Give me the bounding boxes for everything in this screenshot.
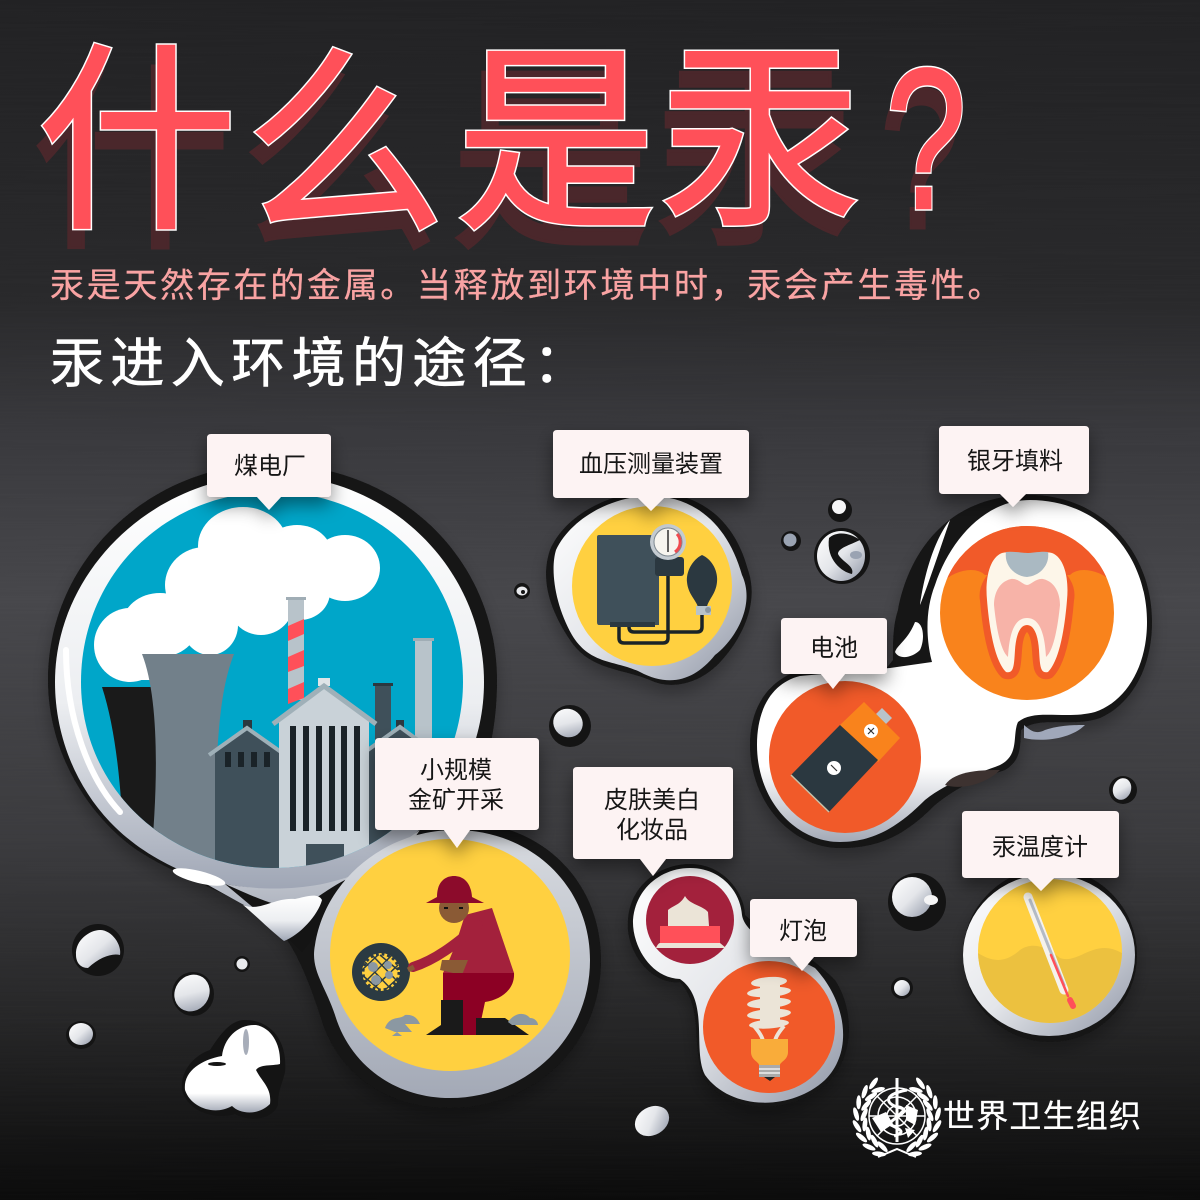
striped stack <box>286 597 306 704</box>
droplet <box>548 703 591 747</box>
WHO logo <box>851 1076 943 1157</box>
title white outline: 什 <box>37 32 237 255</box>
label: 灯泡 <box>750 899 857 971</box>
title text: 么 <box>245 35 445 258</box>
tooth <box>987 552 1067 672</box>
gauge <box>650 524 686 560</box>
cuff <box>597 535 659 625</box>
label: 小规模金矿开采: 小规模 <box>420 757 492 784</box>
silver blob <box>554 496 747 680</box>
title white outline <box>37 27 966 258</box>
eyes <box>444 907 463 909</box>
staff and serpent <box>889 1078 907 1142</box>
title shadow: 么 <box>239 55 439 278</box>
title text <box>37 27 966 258</box>
title text: 是 <box>456 32 656 255</box>
label: 电池: 电池 <box>810 635 858 662</box>
left building <box>209 720 281 870</box>
droplet <box>234 956 250 972</box>
continents <box>872 1105 918 1138</box>
hat <box>426 876 484 903</box>
label: 血压测量装置: 血压测量装置 <box>579 451 723 478</box>
title shadow: 是 <box>450 52 650 275</box>
dark puddle <box>945 770 1000 787</box>
face <box>439 893 469 923</box>
droplet <box>828 498 852 522</box>
title white outline: ? <box>886 27 966 250</box>
blob: black outer <box>48 464 601 1108</box>
subtitle: 汞是天然存在的金属。当释放到环境中时，汞会产生毒性。 <box>50 267 1004 305</box>
droplet <box>66 1021 96 1049</box>
label: 汞温度计: 汞温度计 <box>992 834 1088 861</box>
rocks <box>385 1014 538 1036</box>
black blob <box>750 495 1152 848</box>
droplet <box>781 531 801 551</box>
smoke cloud <box>94 507 380 682</box>
illustration: gold miner <box>352 876 538 1036</box>
silver blob <box>757 500 1147 842</box>
label: 小规模金矿开采: 金矿开采 <box>408 787 504 814</box>
title white outline: 是 <box>456 32 656 255</box>
laurel wreath <box>851 1076 943 1157</box>
droplet <box>514 583 530 599</box>
label: 皮肤美白化妆品: 化妆品 <box>616 817 688 844</box>
silver blob <box>633 868 843 1103</box>
illustration: power plant <box>94 507 434 872</box>
cosmetics circle <box>646 876 734 964</box>
droplet <box>891 977 913 999</box>
title white outline: 汞 <box>660 28 860 251</box>
label: 煤电厂: 煤电厂 <box>234 453 306 480</box>
title white outline: 么 <box>245 35 445 258</box>
label: 电池 <box>781 618 887 689</box>
panel: coal power plant and mining blob <box>48 464 601 1108</box>
label: 银牙填料 <box>939 426 1089 507</box>
legs <box>443 973 514 1035</box>
lower liquid <box>978 946 1122 1023</box>
yellow circle <box>978 879 1122 1023</box>
main building <box>273 678 376 872</box>
panel: thermometer <box>963 868 1137 1042</box>
black blob <box>628 864 849 1107</box>
splash <box>182 1020 285 1119</box>
droplet <box>72 924 124 976</box>
grey cooling tower <box>142 654 234 870</box>
droplet with swirl <box>888 873 946 931</box>
label: 灯泡: 灯泡 <box>779 918 827 945</box>
light bulb <box>747 976 791 1081</box>
droplets <box>66 498 1137 1142</box>
droplet with swirl <box>814 528 870 584</box>
connector <box>655 557 684 576</box>
boots <box>426 1000 529 1035</box>
blob: silver ring <box>55 475 484 889</box>
title text: 什 <box>37 32 237 255</box>
splash join <box>171 830 420 952</box>
WHO name: 世界卫生组织 <box>943 1098 1142 1134</box>
battery <box>791 702 900 812</box>
label: 汞温度计 <box>962 811 1119 891</box>
yellow circle <box>572 506 732 666</box>
tooth circle <box>940 526 1114 700</box>
right stacks <box>373 638 434 742</box>
label: 皮肤美白化妆品 <box>573 767 733 876</box>
filling <box>1006 552 1048 577</box>
tooth halo <box>987 570 1067 672</box>
title text: 汞 <box>660 28 860 251</box>
title <box>31 27 966 278</box>
panel: blood pressure device <box>546 492 752 685</box>
title shadow: 汞 <box>654 48 854 271</box>
gum <box>947 526 1106 578</box>
label: 皮肤美白化妆品: 皮肤美白 <box>604 787 700 814</box>
battery circle <box>769 681 921 833</box>
label: 血压测量装置 <box>553 430 749 511</box>
bulb <box>687 555 717 615</box>
sky <box>81 492 463 868</box>
gold pan <box>352 943 410 1001</box>
right building <box>369 720 418 845</box>
cream jar <box>656 896 726 948</box>
black blob <box>963 868 1137 1042</box>
title shadow: ? <box>880 47 960 270</box>
title shadow <box>31 47 960 278</box>
label: 煤电厂 <box>207 434 331 510</box>
title shadow: 什 <box>31 52 231 275</box>
label: 银牙填料: 银牙填料 <box>967 448 1063 475</box>
body <box>443 908 514 973</box>
black cooling tower <box>102 687 160 833</box>
silver ring <box>963 874 1135 1036</box>
title text: ? <box>886 27 966 250</box>
mining silver ring <box>314 830 590 1098</box>
highlight: left edge <box>66 650 120 812</box>
droplet <box>629 1100 675 1142</box>
droplet <box>1109 776 1137 804</box>
pulp <box>994 579 1060 657</box>
panel: tooth and battery blob <box>750 495 1152 848</box>
label: 小规模金矿开采 <box>375 738 539 848</box>
black blob <box>546 492 752 685</box>
droplet <box>167 968 217 1018</box>
section heading: 汞进入环境的途径： <box>50 334 594 394</box>
thermometer <box>1028 897 1073 1006</box>
mining yellow circle <box>330 839 570 1071</box>
emblem globe <box>869 1088 925 1144</box>
tubes <box>619 576 702 643</box>
panel: cosmetics and bulb blob <box>628 864 849 1107</box>
bulb circle <box>703 961 835 1093</box>
streak highlights <box>895 520 950 657</box>
